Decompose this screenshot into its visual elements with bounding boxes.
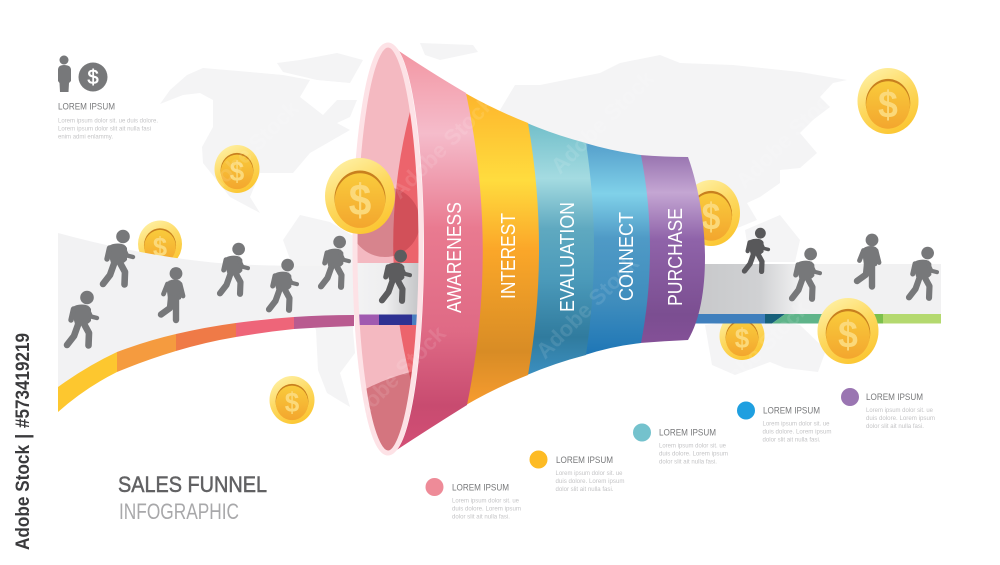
funnel label: purchase: PURCHASE: [665, 208, 687, 306]
legend item 2: dolor slit ait nulla fasi.: [556, 486, 614, 493]
watermark: Adobe Stock: [386, 90, 499, 204]
legend item 5: [841, 388, 935, 430]
title: SALES FUNNEL: [118, 472, 267, 497]
funnel label: connect: CONNECT: [616, 212, 638, 301]
legend item 5: dolor slit ait nulla fasi.: [866, 423, 924, 430]
funnel label: interest: INTEREST: [498, 213, 520, 299]
legend item 4: LOREM IPSUM: [763, 406, 820, 416]
coin: top right: $: [878, 83, 898, 126]
person entering funnel: [382, 250, 410, 301]
legend item 1: LOREM IPSUM: [452, 482, 509, 492]
body text: Lorem ipsum dolor slit ait nulla fasi: [58, 126, 151, 132]
coin: lower left: [270, 376, 314, 424]
person 10: [857, 234, 879, 286]
watermark: Adobe Stock: [531, 250, 644, 364]
legend item 2: LOREM IPSUM: [556, 455, 613, 465]
stock id vertical label: Adobe Stock: [13, 445, 34, 550]
coin: behind left band: [138, 220, 182, 268]
coin: at funnel mouth: [325, 158, 395, 234]
top-left info block: [58, 56, 158, 140]
body text: Lorem ipsum dolor sit. ue duis dolore.: [58, 118, 158, 124]
title block: [118, 472, 267, 524]
stock id vertical label: #573419219: [13, 333, 34, 428]
person 9: [792, 248, 820, 299]
right grey path band: [690, 264, 941, 315]
coin: on right path: [818, 298, 878, 364]
funnel band: purchase: [640, 155, 705, 343]
legend item 1: duis dolore. Lorem ipsum: [452, 506, 521, 512]
map: eurasia: [500, 55, 847, 240]
watermark: [36, 60, 949, 434]
watermark: Adobe Stock: [836, 130, 949, 244]
funnel mouth interior: [358, 48, 418, 450]
legend item 3: Lorem ipsum dolor sit. ue: [659, 442, 726, 450]
rainbow path left: [58, 315, 354, 412]
map: iceland and north europe: [420, 43, 478, 60]
legend item 3: dolor slit ait nulla fasi.: [659, 458, 717, 466]
funnel label: evaluation: EVALUATION: [557, 202, 579, 312]
legend item 2: Lorem ipsum dolor sit. ue: [556, 470, 623, 477]
funnel label: awareness: AWARENESS: [444, 202, 466, 313]
legend item 1: [426, 478, 521, 520]
icon: dollar coin: $: [87, 67, 99, 89]
legend item 5: duis dolore. Lorem ipsum: [866, 415, 935, 422]
body text: [58, 118, 158, 140]
legend item 4: duis dolore. Lorem ipsum: [762, 428, 832, 436]
stock id vertical label: [13, 333, 34, 550]
legend item 3: duis dolore. Lorem ipsum: [659, 450, 728, 458]
legend item 2: [530, 450, 625, 493]
coin: below right band: $: [735, 323, 749, 354]
person 3: [161, 267, 183, 320]
funnel band: awareness: [390, 45, 483, 453]
map: north america: [160, 68, 357, 213]
rainbow path right: [695, 314, 941, 324]
legend item 3: LOREM IPSUM: [659, 428, 716, 438]
left grey path band: [58, 233, 360, 387]
legend item 3: [633, 424, 728, 466]
watermark: Adobe Stock: [701, 295, 814, 409]
coin: upper left on map: [214, 145, 260, 193]
watermark: Adobe Stock: [731, 80, 844, 194]
legend item 4: [737, 402, 832, 444]
person 8: [744, 228, 768, 271]
funnel band: evaluation: [527, 123, 594, 375]
walking people on the right: [744, 228, 937, 299]
coin: lower left: $: [285, 387, 299, 418]
person 5: [269, 259, 297, 310]
map: southeast asia islands: [745, 215, 800, 262]
watermark: Adobe Stock: [546, 65, 659, 179]
coin: top right: [858, 68, 918, 134]
person 11: [909, 247, 937, 298]
map: south america: [283, 215, 360, 407]
body text: enim admi enlammy.: [58, 134, 113, 140]
watermark: Adobe Stock: [338, 320, 451, 434]
funnel band: connect: [585, 143, 650, 355]
funnel band: interest: [465, 93, 539, 405]
coin: below right band: [720, 312, 764, 360]
icon: person: [58, 56, 71, 92]
person 4: [220, 243, 248, 294]
funnel mouth rim: [355, 45, 421, 453]
subtitle: INFOGRAPHIC: [119, 499, 239, 524]
person 1: [67, 291, 97, 346]
legend item 2: duis dolore. Lorem ipsum: [556, 478, 625, 485]
coin: behind left band: $: [153, 231, 167, 262]
map: arctic islands: [277, 53, 363, 83]
legend item 1: Lorem ipsum dolor sit. ue: [452, 498, 519, 504]
coin: on right path: $: [838, 313, 858, 356]
coin: upper left on map: $: [230, 156, 244, 187]
walking people on the left: [67, 230, 349, 346]
stock id vertical label: |: [13, 434, 34, 439]
legend item 5: LOREM IPSUM: [866, 392, 923, 402]
coin: behind funnel tail: [682, 180, 740, 246]
coin: at funnel mouth: $: [349, 175, 371, 224]
funnel: [340, 40, 705, 460]
watermark: Adobe Stock: [191, 95, 304, 209]
legend item 4: dolor slit ait nulla fasi.: [762, 436, 821, 444]
map: australia: [705, 318, 826, 375]
world map background: [160, 43, 847, 407]
watermark: Adobe Stock: [36, 60, 149, 174]
legend item 4: Lorem ipsum dolor sit. ue: [762, 420, 830, 428]
coin: behind funnel tail: $: [702, 194, 720, 238]
person 6: [321, 236, 349, 287]
heading: LOREM IPSUM: [58, 102, 115, 112]
legend item 1: dolor slit ait nulla fasi.: [452, 514, 510, 520]
legend item 5: Lorem ipsum dolor sit. ue: [866, 407, 933, 414]
person 2: [103, 230, 133, 284]
